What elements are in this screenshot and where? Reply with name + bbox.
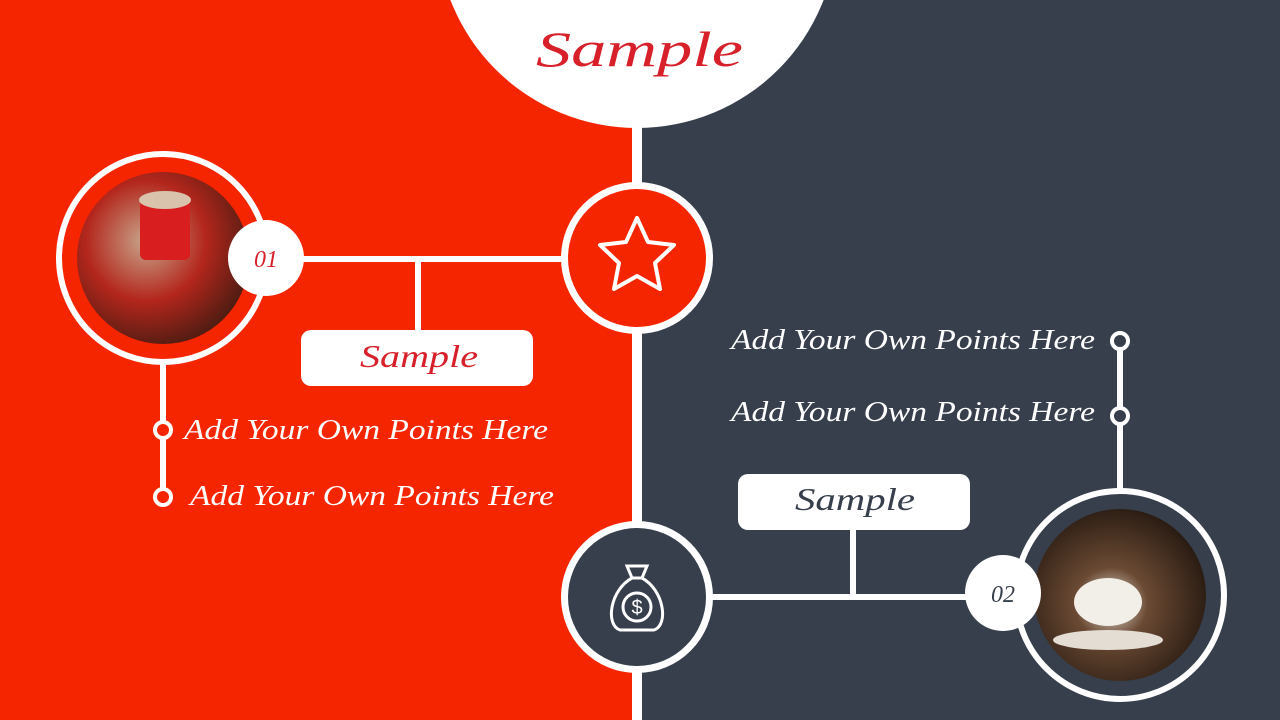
label box: Sample xyxy=(301,330,533,386)
image circle 02 xyxy=(1016,491,1224,699)
text: points right xyxy=(729,325,1095,428)
panel: item 02 xyxy=(712,325,1224,699)
number badge 01: 01 xyxy=(254,247,278,273)
number badge 02: 02 xyxy=(991,582,1015,608)
panel: item 01 xyxy=(59,154,562,512)
text: points left: Add Your Own Points Here xyxy=(188,481,554,512)
left red panel xyxy=(0,0,634,720)
image circle 01 xyxy=(59,154,267,362)
star node xyxy=(561,182,713,334)
text: points left: Add Your Own Points Here xyxy=(182,415,548,446)
title: Sample xyxy=(536,21,743,77)
number badge 02 xyxy=(965,555,1041,631)
label box: Sample xyxy=(738,474,970,530)
right dark panel xyxy=(640,0,1280,720)
money node xyxy=(561,521,713,673)
central vertical line xyxy=(632,0,642,720)
label box: Sample: Sample xyxy=(795,481,915,517)
title circle xyxy=(437,0,837,128)
text: points left xyxy=(182,415,554,512)
icon: money bag xyxy=(611,566,663,630)
text: points right: Add Your Own Points Here xyxy=(729,325,1095,356)
text: points right: Add Your Own Points Here xyxy=(729,397,1095,428)
label box: Sample: Sample xyxy=(360,338,478,374)
number badge 01 xyxy=(228,220,304,296)
icon: star xyxy=(600,218,674,289)
icon: money bag: $ xyxy=(631,597,643,619)
